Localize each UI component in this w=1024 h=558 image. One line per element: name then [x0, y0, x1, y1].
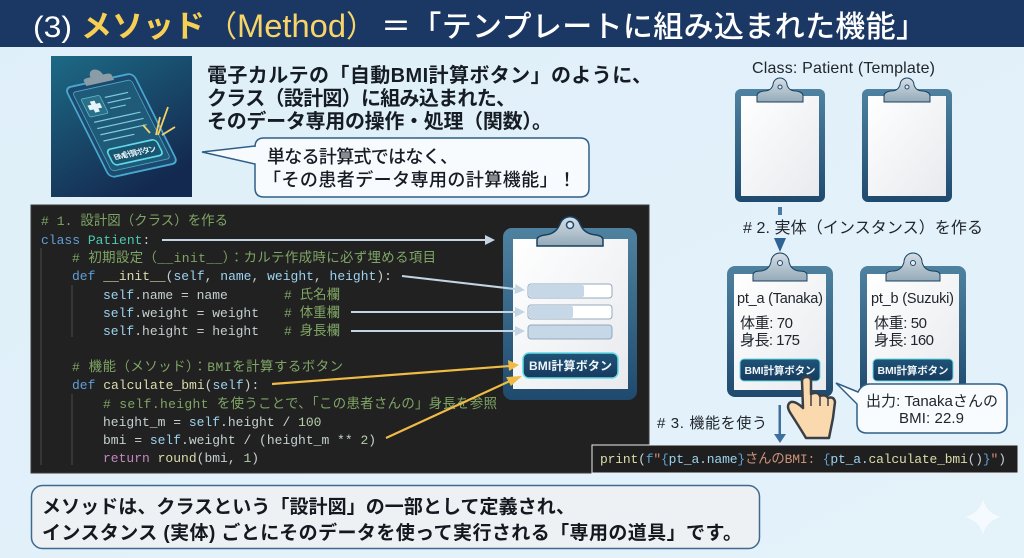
summary box: メソッドは、クラスという「設計図」の一部として定義され、	[42, 495, 575, 518]
button: BMI計算ボタン	[744, 364, 816, 377]
code lines: def calculate_bmi(self):	[72, 378, 259, 393]
intro text: そのデータ専用の操作・処理（関数）。	[207, 109, 552, 133]
intro text: クラス（設計図）に組み込まれた、	[207, 87, 516, 110]
code lines: # 氏名欄	[284, 287, 340, 304]
title: メソッド	[81, 9, 205, 44]
BMI button	[523, 353, 618, 378]
icon: sparkle	[965, 499, 1001, 535]
panel: print code	[592, 445, 1018, 473]
title: （	[207, 11, 237, 44]
arrow: init to name field	[402, 276, 515, 289]
label: step 2: # 2. 実体（インスタンス）を作る	[743, 219, 983, 237]
clipboard: instance pt_b: 体重: 50	[874, 315, 927, 332]
intro text	[207, 64, 652, 133]
clipboard: class template	[503, 217, 637, 400]
label: class template: Class: Patient (Template)	[752, 60, 935, 77]
clipboard: instance pt_a: 身長: 175	[740, 332, 800, 349]
clipboard: instance pt_a: 体重: 70	[740, 315, 793, 332]
title: Method	[237, 8, 346, 44]
button	[873, 359, 953, 381]
code lines: return round(bmi, 1)	[103, 451, 259, 466]
callout: output	[836, 383, 1007, 433]
callout: dedicated calculation: 「その患者データ専用の計算機能」！	[263, 169, 576, 190]
button: BMI計算ボタン	[878, 364, 948, 377]
clipboard: instance pt_b	[860, 253, 966, 397]
code lines: self.weight = weight	[103, 306, 259, 321]
clipboard: instance pt_a: pt_a (Tanaka)	[737, 291, 823, 307]
header band	[0, 0, 1024, 47]
panel: print code: print(f"{pt_a.name}さんのBMI: {pt_a.calculate_bmi()}")	[600, 451, 1006, 468]
arrow: body to button	[386, 376, 522, 438]
code lines: bmi = self.weight / (height_m ** 2)	[103, 433, 376, 448]
callout: dedicated calculation: 単なる計算式ではなく、	[267, 147, 458, 167]
icon: glowing clipboard picture	[51, 56, 192, 197]
code lines	[41, 213, 497, 466]
title	[33, 8, 926, 44]
clipboard: template 2	[862, 78, 952, 202]
code lines: # self.height を使うことで、「この患者さんの」身長を参照	[103, 395, 497, 413]
code lines: # 機能（メソッド）：BMIを計算するボタン	[72, 359, 343, 376]
arrow: class to clipboard	[162, 239, 485, 241]
title: ＝「テンプレートに組み込まれた機能」	[381, 11, 926, 44]
height field	[528, 325, 612, 339]
code lines: self.height = height	[103, 324, 259, 339]
title: (3)	[33, 11, 72, 44]
code lines: class Patient:	[41, 233, 150, 248]
arrow: weight to weight field	[351, 311, 515, 313]
summary box: インスタンス (実体) ごとにそのデータを使って実行される「専用の道具」です。	[42, 521, 742, 544]
callout: output: BMI: 22.9	[899, 410, 964, 427]
panel: class code	[31, 205, 649, 473]
clipboard: instance pt_b: 身長: 160	[874, 332, 934, 349]
icon: pointing hand	[788, 377, 835, 438]
summary box	[32, 486, 760, 548]
button	[740, 359, 820, 381]
arrow: height to height field	[351, 330, 515, 332]
arrow: template to instance	[774, 207, 786, 252]
label: step 3: # 3. 機能を使う	[657, 415, 767, 432]
BMI button: BMI計算ボタン	[529, 358, 612, 373]
icon: glowing clipboard picture: BMI計算ボタン	[112, 143, 158, 162]
code lines: # 1. 設計図（クラス）を作る	[41, 213, 228, 230]
code lines: def __init__(self, name, weight, height):	[72, 269, 392, 284]
title: ）	[346, 11, 376, 44]
code lines: height_m = self.height / 100	[103, 415, 321, 430]
clipboard: template 1	[735, 78, 825, 202]
clipboard: instance pt_a	[727, 253, 833, 397]
intro text: 電子カルテの「自動BMI計算ボタン」のように、	[207, 64, 652, 87]
callout: output: 出力: Tanakaさんの	[866, 393, 998, 410]
weight field	[528, 305, 612, 319]
clipboard: instance pt_b: pt_b (Suzuki)	[871, 291, 954, 307]
code lines: # 体重欄	[284, 305, 340, 322]
code lines: # 初期設定（__init__）：カルテ作成時に必ず埋める項目	[72, 250, 436, 267]
code lines: # 身長欄	[284, 323, 340, 340]
callout: dedicated calculation	[202, 138, 589, 197]
code lines: self.name = name	[103, 288, 228, 303]
name field	[528, 284, 612, 298]
arrow: use method	[774, 405, 786, 443]
arrow: method to button	[272, 360, 519, 384]
